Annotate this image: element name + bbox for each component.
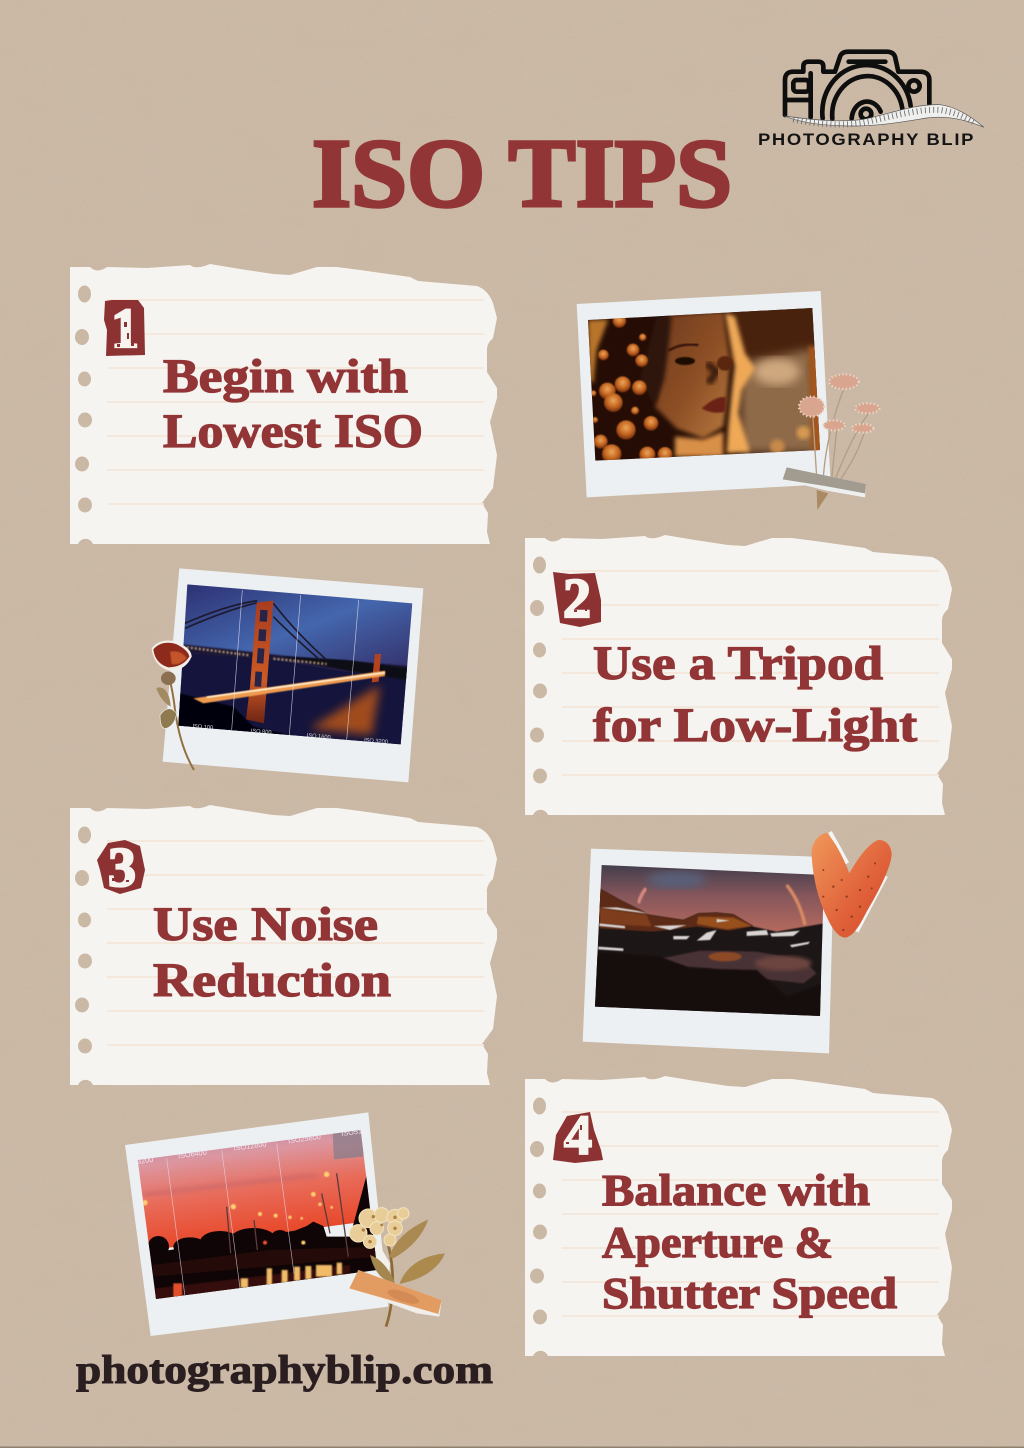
icon: strawberry heart bbox=[812, 832, 892, 938]
bridge image: ISO 800 bbox=[250, 728, 272, 736]
bridge image: ISO 100 bbox=[192, 724, 213, 731]
panel: tip 2 note bbox=[525, 535, 952, 815]
sunset image bbox=[138, 1130, 376, 1299]
logo: Photography Blip bbox=[758, 52, 984, 149]
heading: tip 2: for Low-Light bbox=[593, 699, 917, 752]
sunset image: ISO6400 bbox=[177, 1148, 207, 1160]
photo: sunset road polaroid with flowers bbox=[109, 1103, 445, 1336]
photo: portrait polaroid with dried flowers bbox=[577, 291, 879, 510]
polaroid frame bbox=[163, 568, 423, 782]
badge: number 4 bbox=[553, 1105, 603, 1167]
heading: tip 4: Shutter Speed bbox=[602, 1269, 897, 1318]
sunset image: ISO51 bbox=[341, 1126, 363, 1138]
badge: number 3 bbox=[97, 837, 145, 899]
badge: number 1 bbox=[104, 298, 145, 360]
badge: number 4: 4 bbox=[564, 1105, 592, 1167]
heading: tip 4 bbox=[602, 1166, 897, 1318]
badge: number 3: 3 bbox=[108, 837, 136, 899]
bridge image: ISO 3200 bbox=[364, 738, 388, 746]
icon: dried flowers and orange tape bbox=[349, 1208, 445, 1327]
polaroid frame bbox=[125, 1112, 388, 1336]
badge: number 2 bbox=[553, 568, 601, 630]
heading: tip 4: Aperture & bbox=[602, 1218, 833, 1267]
portrait image bbox=[587, 303, 823, 464]
mountain image bbox=[593, 863, 827, 1017]
photo: mountain lake polaroid with heart bbox=[583, 832, 892, 1053]
polaroid frame bbox=[577, 291, 831, 497]
heading: tip 3: Reduction bbox=[153, 954, 391, 1007]
sunset image: ISO25600 bbox=[287, 1132, 321, 1145]
heading: tip 2: Use a Tripod bbox=[593, 637, 883, 690]
title: ISO TIPS bbox=[312, 120, 732, 227]
heading: tip 2 bbox=[593, 637, 917, 752]
heading: tip 3: Use Noise bbox=[153, 898, 378, 951]
heading: tip 1: Lowest ISO bbox=[163, 405, 423, 458]
panel: tip 4 note bbox=[525, 1076, 952, 1356]
icon: dried rose bbox=[152, 640, 194, 770]
panel: tip 3 note bbox=[70, 805, 497, 1085]
logo wordmark: PHOTOGRAPHY BLIP bbox=[758, 130, 975, 149]
bridge image: ISO 1600 bbox=[306, 733, 331, 741]
photo: Golden Gate Bridge ISO comparison polaroid with rose bbox=[152, 568, 423, 782]
icon: camera with film ribbon bbox=[784, 52, 984, 127]
heading: tip 1: Begin with bbox=[163, 350, 408, 403]
icon: dried flowers and tape bbox=[783, 374, 879, 510]
badge: number 2: 2 bbox=[563, 568, 591, 630]
sunset image: 3200 bbox=[136, 1155, 154, 1166]
badge: number 1: 1 bbox=[111, 298, 139, 360]
panel: tip 1 note bbox=[70, 264, 497, 544]
heading: tip 4: Balance with bbox=[602, 1166, 870, 1215]
heading: tip 1 bbox=[163, 350, 423, 458]
footer website: photographyblip.com bbox=[76, 1347, 493, 1392]
polaroid frame bbox=[583, 849, 834, 1053]
bridge image bbox=[173, 580, 417, 750]
sunset image: ISO12800 bbox=[233, 1139, 267, 1153]
heading: tip 3 bbox=[153, 898, 391, 1007]
